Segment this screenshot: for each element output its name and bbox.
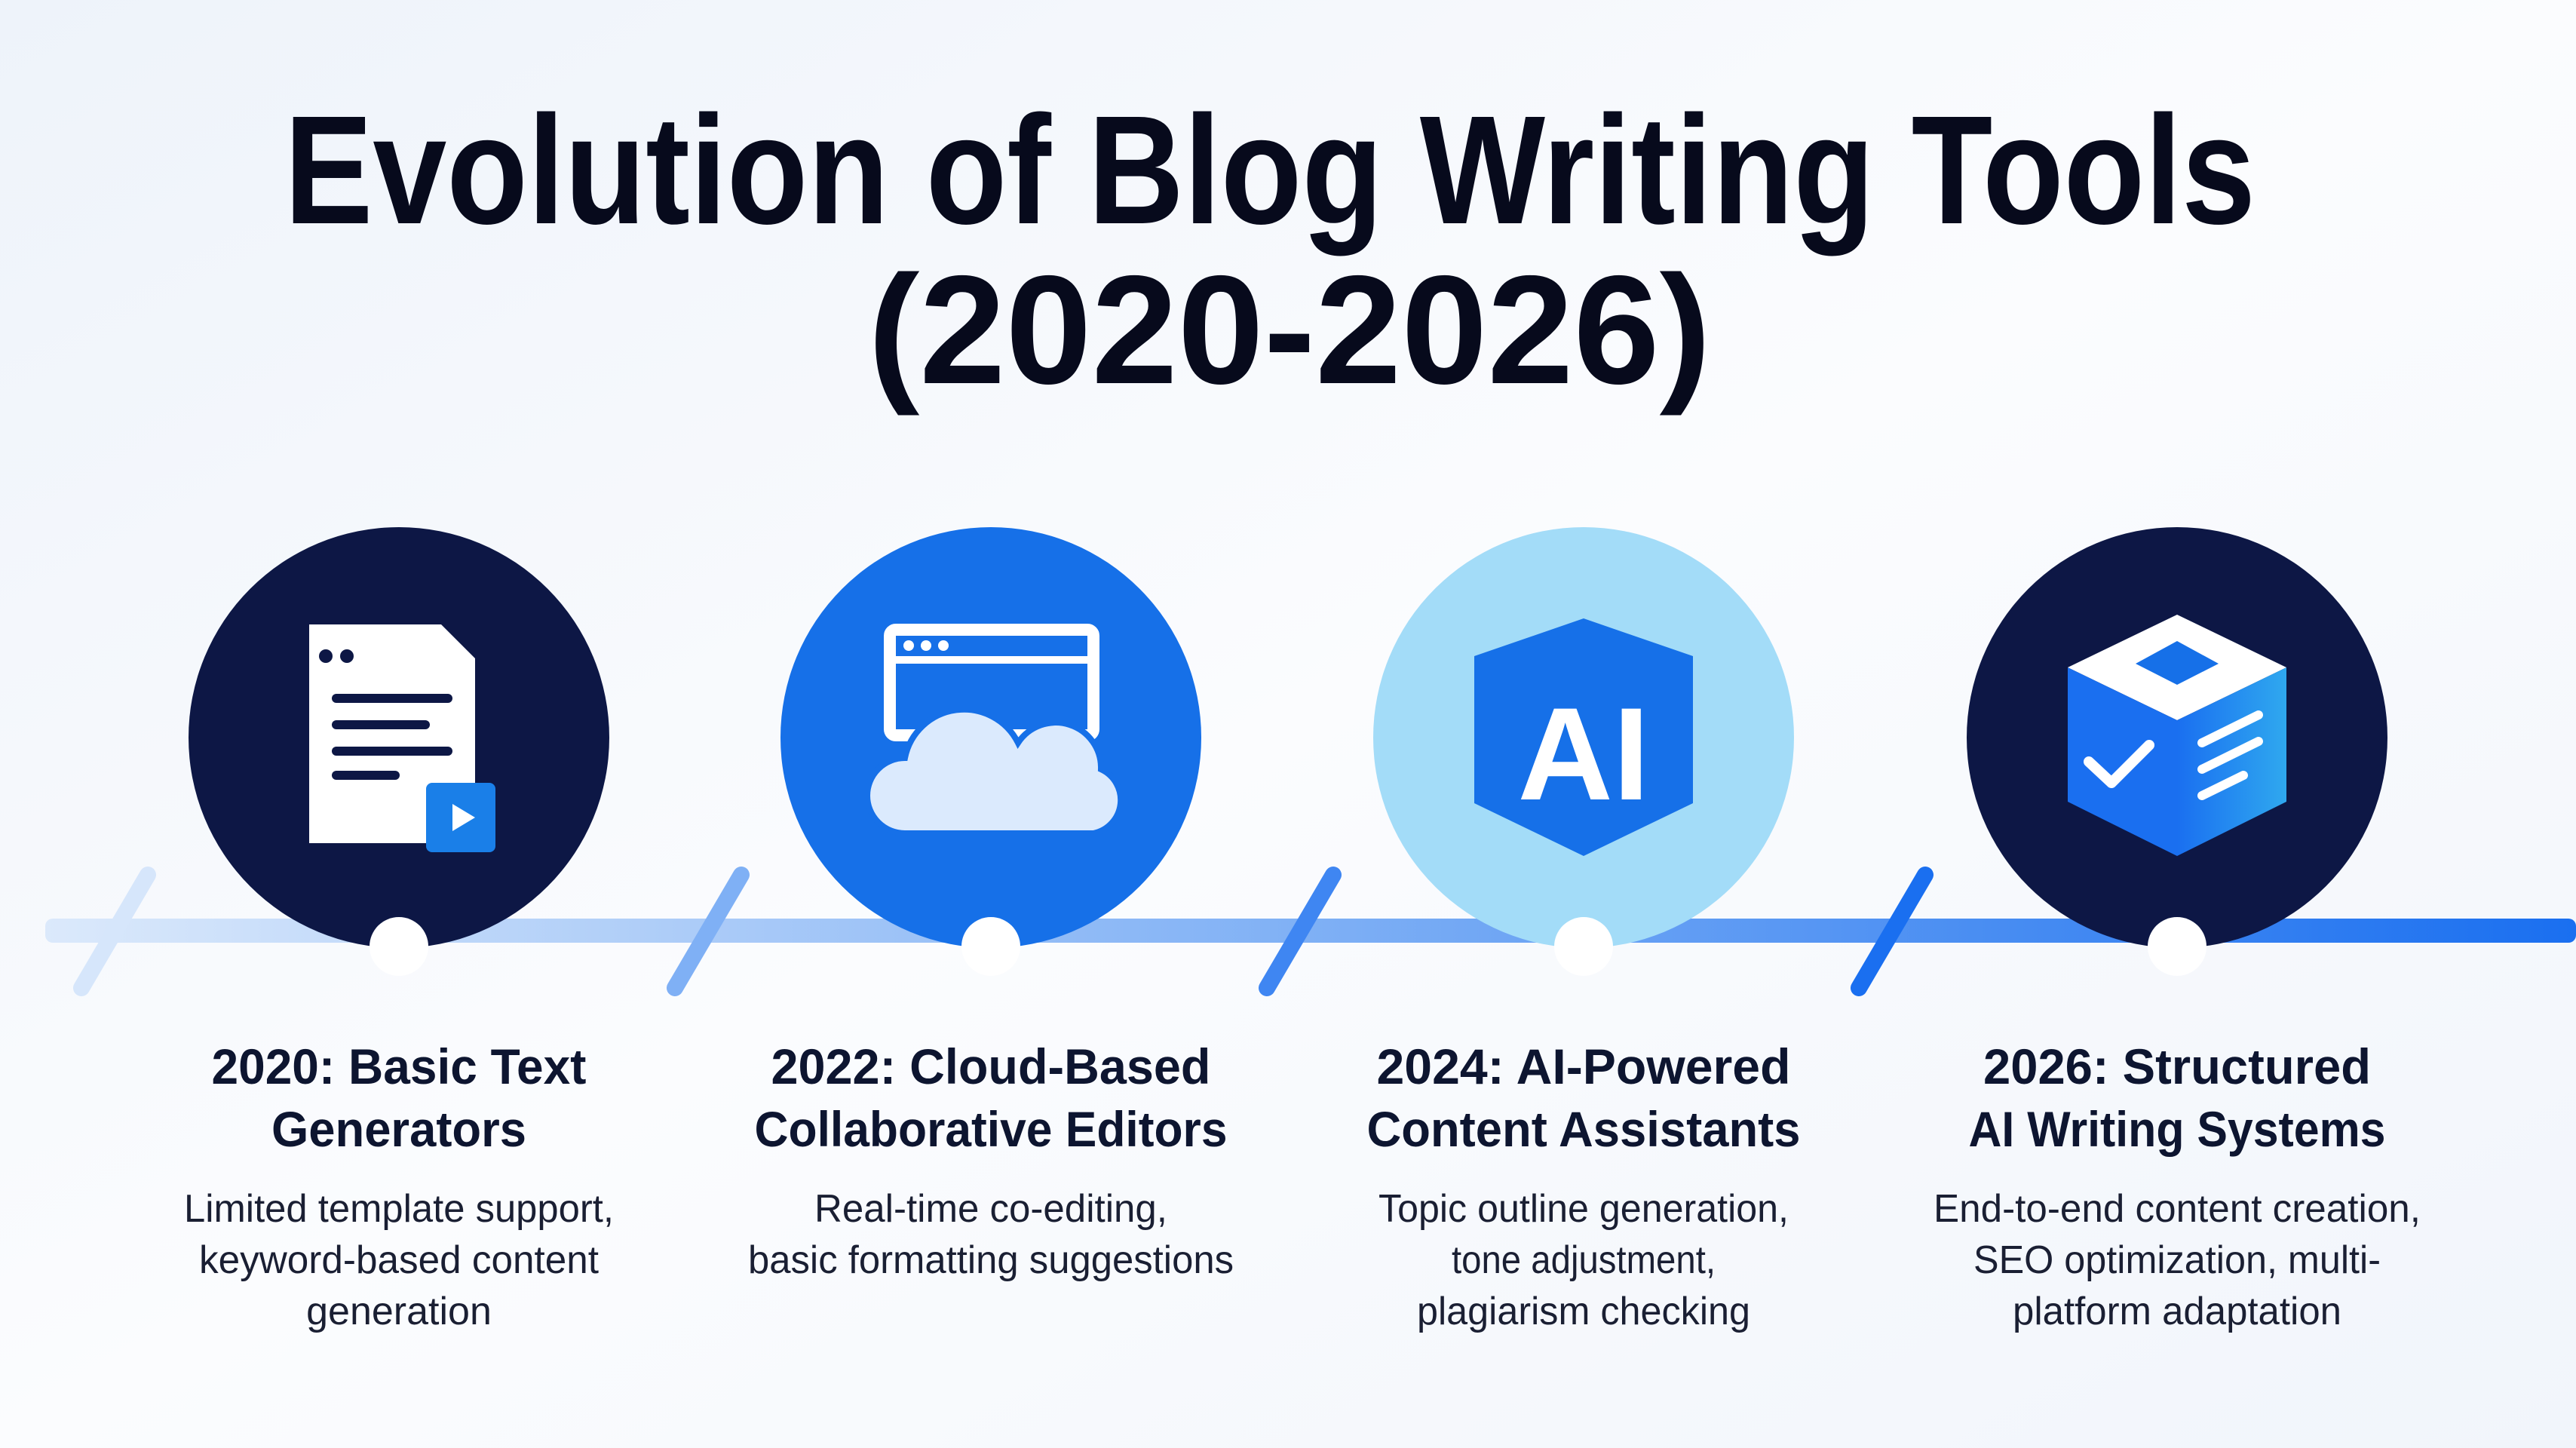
step 1 text	[184, 1038, 614, 1333]
step 4 text: AI Writing Systems	[1968, 1101, 2386, 1157]
title	[284, 84, 2256, 416]
step 3 text: Content Assistants	[1366, 1101, 1801, 1157]
icon: cloud browser	[867, 630, 1121, 833]
timeline line	[45, 919, 2576, 943]
step 1 text: keyword-based content	[199, 1238, 600, 1282]
circle 2: 2022	[780, 527, 1201, 948]
icon: AI hexagon: AI	[1517, 681, 1650, 828]
step 1 text: generation	[306, 1290, 492, 1333]
icon: document	[309, 624, 495, 852]
step 4 text	[1934, 1038, 2421, 1333]
circle 3: 2024	[1373, 527, 1794, 948]
title: (2020-2026)	[868, 244, 1711, 416]
step 1 text: 2020: Basic Text	[211, 1038, 587, 1094]
step 3 text: Topic outline generation,	[1378, 1187, 1789, 1231]
step 4 text: SEO optimization, multi-	[1973, 1238, 2381, 1282]
circle 1: 2020	[189, 527, 609, 948]
step 3 text: tone adjustment,	[1452, 1238, 1716, 1282]
step 4 text: platform adaptation	[2013, 1290, 2341, 1333]
circle 4: 2026	[1967, 527, 2387, 948]
step 3 text: plagiarism checking	[1417, 1290, 1750, 1333]
step 1 text: Generators	[271, 1101, 526, 1157]
slash markers	[81, 875, 1925, 988]
step 2 text: 2022: Cloud-Based	[771, 1038, 1211, 1094]
step 2 text: Real-time co-editing,	[814, 1187, 1167, 1231]
step 4 text: End-to-end content creation,	[1934, 1187, 2421, 1231]
icon: AI hexagon	[1474, 618, 1693, 856]
title: Evolution of Blog Writing Tools	[284, 84, 2256, 256]
step 2 text	[748, 1038, 1234, 1282]
step 4 text: 2026: Structured	[1983, 1038, 2371, 1094]
step 3 text	[1366, 1038, 1801, 1333]
icon: cube	[2068, 615, 2286, 856]
step 3 text: 2024: AI-Powered	[1377, 1038, 1790, 1094]
step 1 text: Limited template support,	[184, 1187, 614, 1231]
step 2 text: basic formatting suggestions	[748, 1238, 1234, 1282]
step 2 text: Collaborative Editors	[754, 1101, 1228, 1157]
timeline dots	[370, 917, 2206, 976]
